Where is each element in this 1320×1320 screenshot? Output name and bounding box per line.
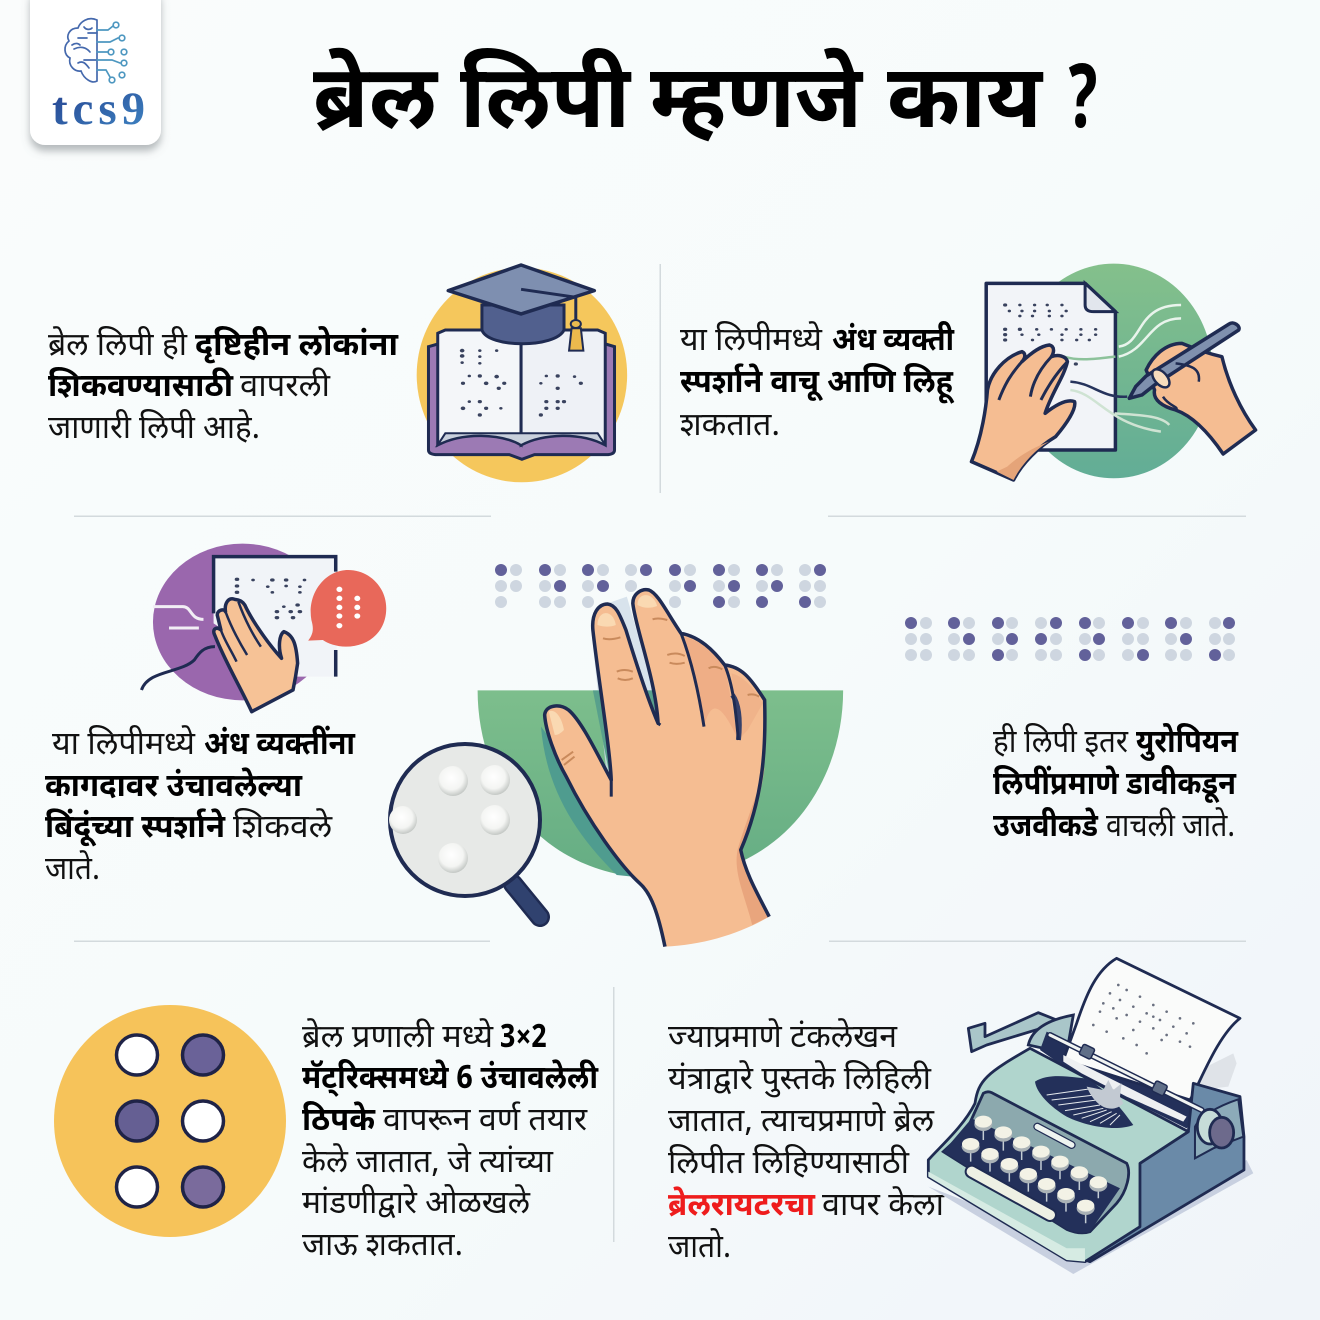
text block: 3x2 matrix: केले जातात, जे त्यांच्या <box>302 1143 554 1186</box>
text block: intro definition: ब्रेल लिपी ही <box>48 326 188 369</box>
fingernails <box>549 595 657 735</box>
text block: learning through raised dots: बिंदूंच्या स्पर्शाने <box>45 808 226 851</box>
text block: 3x2 matrix: वापरून वर्ण तयार <box>383 1101 588 1144</box>
text block: braille writer <box>668 1018 945 1271</box>
icon: six-dot braille cell <box>54 1005 286 1237</box>
title: काय <box>887 48 1044 163</box>
text block: 3x2 matrix: जाऊ शकतात. <box>302 1227 463 1269</box>
text block: intro definition: जाणारी लिपी आहे. <box>48 409 260 452</box>
text block: read and write by touch: शकतात. <box>680 407 780 449</box>
text block: intro definition: वापरली <box>240 367 331 410</box>
text block: 3x2 matrix: मॅट्रिक्समध्ये 6 उंचावलेली <box>302 1059 599 1102</box>
panel dividers <box>74 264 1246 1242</box>
text block: braille writer: जातात, त्याचप्रमाणे ब्रेल <box>668 1102 935 1145</box>
text block: learning through raised dots: कागदावर उंचावलेल्या <box>45 767 303 810</box>
icon: braille typewriter <box>928 958 1253 1274</box>
icon: brain circuit <box>65 19 127 83</box>
central illustration: hand on green half circle <box>478 590 843 947</box>
text block: braille writer: ब्रेलरायटरचा <box>668 1186 816 1229</box>
text block: braille writer: लिपीत लिहिण्यासाठी <box>668 1144 910 1187</box>
text block: braille writer: जातो. <box>668 1228 731 1271</box>
text block: braille writer: यंत्राद्वारे पुस्तके लिहिली <box>668 1060 932 1103</box>
text block: learning through raised dots: या लिपीमध्ये <box>52 725 196 768</box>
text block: left to right reading: वाचली जाते. <box>1106 807 1235 850</box>
icon: hand on braille sheet with speech bubble <box>141 544 386 712</box>
text block: left to right reading: लिपींप्रमाणे डावीकडून <box>993 765 1237 808</box>
text block: learning through raised dots: अंध व्यक्तींना <box>204 725 356 768</box>
text block: learning through raised dots <box>45 725 356 893</box>
text block: 3x2 matrix: ब्रेल प्रणाली मध्ये <box>302 1018 494 1061</box>
text block: 3x2 matrix: मांडणीद्वारे ओळखले <box>302 1184 531 1227</box>
text block: left to right reading: उजवीकडे <box>993 807 1099 850</box>
braille dot row: right <box>905 617 1235 661</box>
text block: read and write by touch: अंध व्यक्ती <box>832 321 955 364</box>
finger and hand shadow <box>541 727 649 878</box>
text block: 3x2 matrix: ठिपके <box>302 1101 376 1144</box>
text block: left to right reading <box>993 723 1239 850</box>
hand <box>545 590 769 947</box>
braille dot row: top centre <box>495 564 826 608</box>
text block: read and write by touch <box>680 321 955 449</box>
title: ? <box>1065 48 1100 163</box>
logo wordmark: tcs9 <box>52 83 145 135</box>
text block: 3x2 matrix <box>302 1018 599 1269</box>
text block: read and write by touch: स्पर्शाने वाचू आणि लिहू <box>680 363 955 406</box>
text block: braille writer: वापर केला <box>822 1186 945 1229</box>
icon: open braille book with graduation cap <box>417 265 627 482</box>
title: म्हणजे <box>650 47 864 163</box>
green half circle <box>478 690 843 878</box>
text block: left to right reading: ही लिपी इतर <box>993 723 1129 766</box>
title: लिपी <box>460 48 632 163</box>
icon: hands reading and writing braille <box>971 264 1256 480</box>
title: ब्रेल <box>313 47 439 163</box>
text block: read and write by touch: या लिपीमध्ये <box>680 321 823 364</box>
text block: intro definition: दृष्टिहीन लोकांना <box>195 326 399 369</box>
text block: left to right reading: युरोपियन <box>1136 723 1239 766</box>
text block: intro definition: शिकवण्यासाठी <box>48 367 234 410</box>
text block: learning through raised dots: जाते. <box>45 850 100 893</box>
text block: learning through raised dots: शिकवले <box>233 808 333 851</box>
text block: braille writer: ज्याप्रमाणे टंकलेखन <box>668 1018 898 1061</box>
magnifier with raised braille dots <box>389 744 540 917</box>
title <box>313 47 1100 163</box>
text block: intro definition <box>48 326 399 452</box>
text block: 3x2 matrix: 3×2 <box>500 1019 547 1061</box>
logo card <box>30 0 161 145</box>
